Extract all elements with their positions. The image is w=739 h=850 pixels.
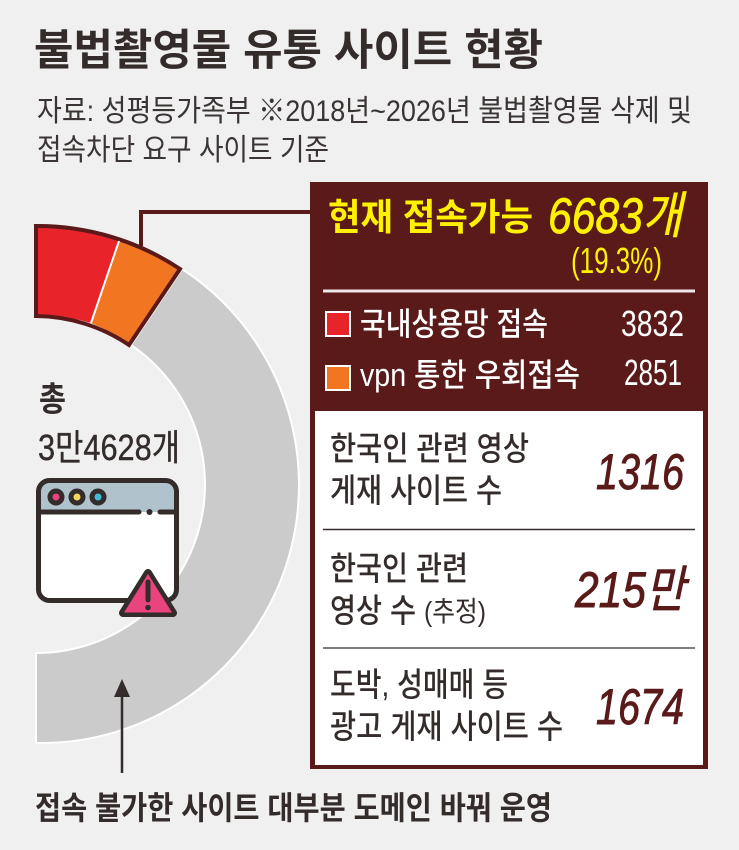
segment: vpn [91,240,180,345]
stat: sites with Korean videos: 1316 [596,444,684,500]
heading: accessible count: 현재 접속가능 [328,197,533,238]
legend: vpn: vpn 통한 우회접속 [360,357,580,393]
stat: sites with Korean videos [330,430,684,509]
segment: inaccessible sites [36,269,299,743]
icon: browser warning [38,480,176,613]
accessible outline [36,226,180,345]
total label: 3만4628개 [38,427,180,468]
stat: Korean video count: 영상 수 [330,592,416,629]
arrow [114,679,130,773]
stat: Korean video count: 한국인 관련 [330,550,468,587]
legend: domestic network [326,303,684,344]
stat: gambling ads: 광고 게재 사이트 수 [330,708,563,745]
stat: sites with Korean videos: 한국인 관련 영상 [330,430,529,467]
source note [37,95,692,167]
stat: Korean video count: 215만 [574,562,690,618]
segment divider [91,241,119,323]
total label [38,381,180,468]
heading: accessible count: (19.3%) [571,240,662,281]
legend: vpn: 2851 [624,352,682,393]
stat: gambling ads: 도박, 성매매 등 [330,666,508,703]
stat: Korean video count: (추정) [424,596,486,627]
title: 불법촬영물 유통 사이트 현황 [34,27,543,75]
heading: accessible count: 6683개 [548,188,687,244]
legend: domestic network: 국내상용망 접속 [360,306,548,342]
panel: detail stats [315,411,703,765]
legend: domestic network: 3832 [621,303,684,344]
chart caption: 접속 불가한 사이트 대부분 도메인 바꿔 운영 [35,790,552,826]
source note: 접속차단 요구 사이트 기준 [37,134,329,167]
stat: gambling ads: 1674 [596,679,684,735]
connector line [141,212,310,246]
stat: gambling ads [330,666,684,745]
stat: Korean video count [330,550,690,629]
panel: accessible sites [310,182,708,769]
legend: vpn [326,352,682,393]
segment: domestic network [36,226,119,323]
total label: 총 [39,381,66,419]
stat: sites with Korean videos: 게재 사이트 수 [330,472,502,509]
heading: accessible count [328,188,687,281]
semicircle chart [36,212,310,743]
